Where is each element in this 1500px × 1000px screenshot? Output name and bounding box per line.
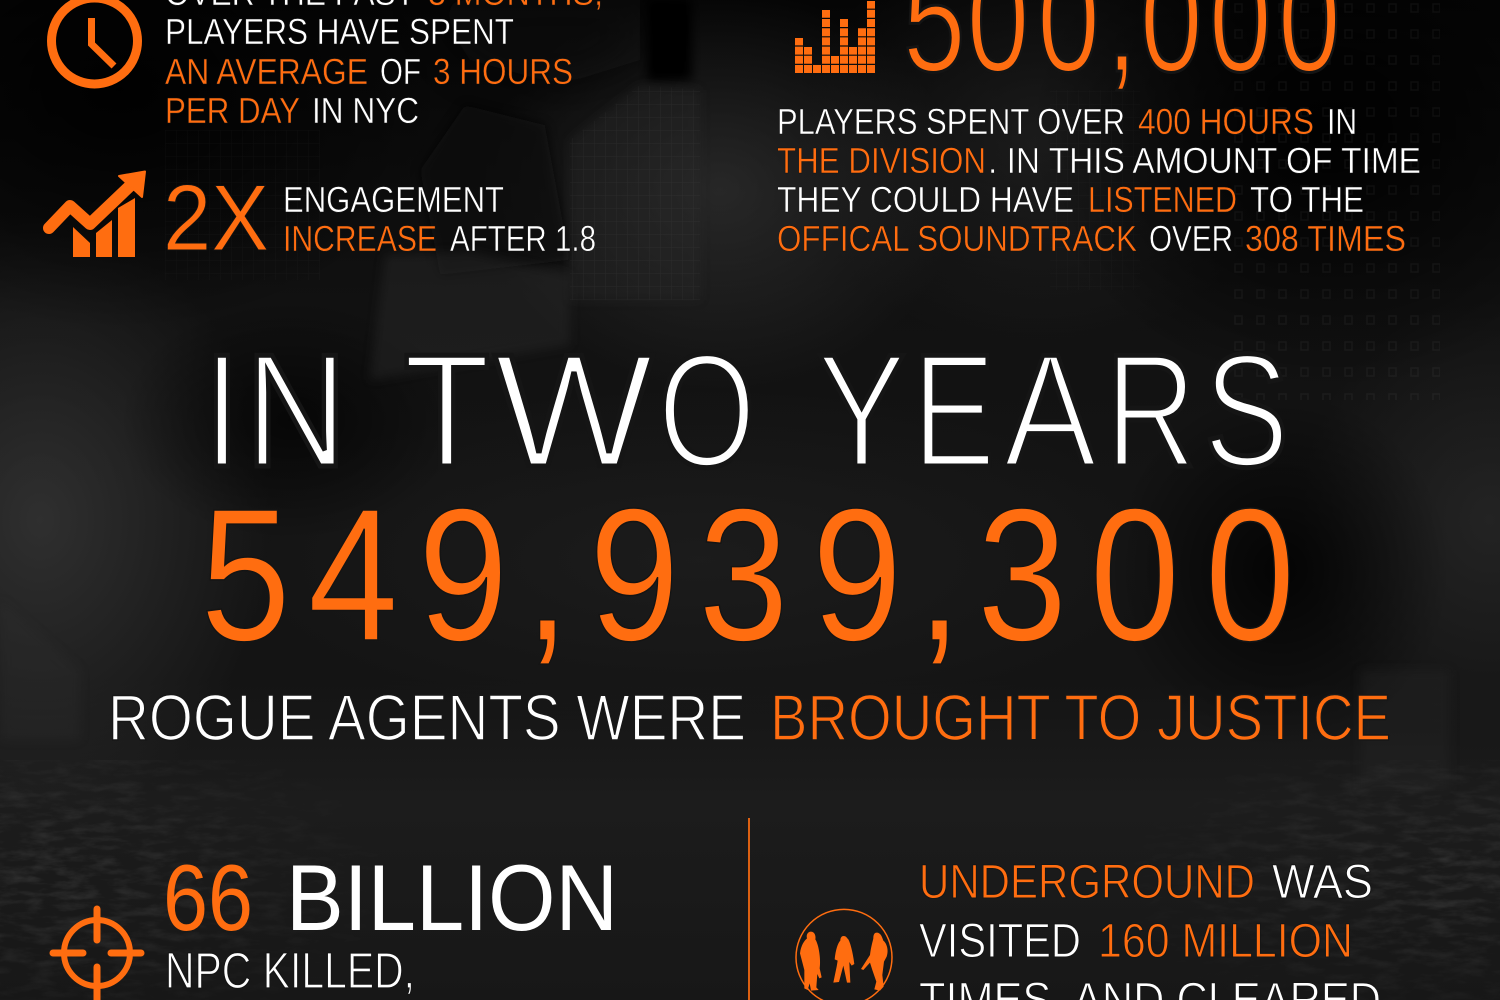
headline: in two years: R bbox=[1106, 320, 1196, 501]
number: 2X: 2X bbox=[163, 165, 269, 270]
text: soundtrack comparison: THE DIVISION bbox=[777, 140, 986, 181]
icon: crosshair bbox=[53, 909, 141, 1000]
text: soundtrack comparison: 400 HOURS bbox=[1138, 101, 1314, 142]
text: soundtrack comparison: OFFICAL SOUNDTRACK bbox=[777, 218, 1137, 259]
text: underground visited 160 million times bbox=[919, 856, 1381, 1000]
text: engagement increase after 1.8: ENGAGEMENT bbox=[283, 179, 504, 220]
headline: in two years bbox=[204, 320, 1289, 501]
text: average hours per day: OF bbox=[380, 51, 421, 92]
headline: in two years: Y bbox=[817, 321, 906, 501]
text: average hours per day bbox=[165, 0, 603, 131]
text: soundtrack comparison: TO THE bbox=[1250, 179, 1364, 220]
text: soundtrack comparison: THEY COULD HAVE bbox=[777, 179, 1074, 220]
icon: clock bbox=[52, 0, 138, 84]
text: soundtrack comparison: . IN THIS AMOUNT OF TIME bbox=[988, 140, 1421, 181]
stat: engagement increase bbox=[49, 165, 596, 270]
text: engagement increase after 1.8: INCREASE bbox=[283, 218, 437, 259]
text: engagement increase after 1.8: AFTER 1.8 bbox=[450, 218, 596, 259]
text: soundtrack comparison: 308 TIMES bbox=[1245, 218, 1406, 259]
text: average hours per day: 3 HOURS bbox=[433, 51, 573, 92]
text: soundtrack comparison: IN bbox=[1327, 101, 1357, 142]
caption: rogue agents brought to justice: BROUGHT TO JUSTICE bbox=[770, 681, 1391, 754]
number: 66 billion: BILLION bbox=[286, 845, 618, 950]
stat: underground visits bbox=[796, 856, 1381, 1000]
number: 66 billion bbox=[163, 845, 618, 950]
text: underground visited 160 million times: 160 MILLION bbox=[1098, 915, 1353, 968]
headline: in two years: T bbox=[404, 322, 490, 501]
icon: equalizer bars bbox=[799, 1, 871, 73]
icon: rising chart bbox=[49, 172, 145, 257]
text: soundtrack comparison bbox=[777, 101, 1421, 259]
caption: rogue agents brought to justice bbox=[108, 681, 1391, 754]
text: average hours per day: IN NYC bbox=[312, 90, 419, 131]
text: underground visited 160 million times: WAS bbox=[1272, 856, 1373, 909]
text: underground visited 160 million times: VISITED bbox=[919, 915, 1081, 968]
headline: in two years: N bbox=[245, 322, 347, 501]
stat: 500,000 players bbox=[777, 0, 1421, 259]
text: average hours per day: AN AVERAGE bbox=[165, 51, 368, 92]
text: NPC killed: NPC KILLED, bbox=[165, 942, 415, 999]
text: soundtrack comparison: PLAYERS SPENT OVER bbox=[777, 101, 1125, 142]
text: underground visited 160 million times: UNDERGROUND bbox=[919, 856, 1255, 909]
headline: in two years: A bbox=[1004, 320, 1097, 500]
text: engagement increase after 1.8 bbox=[283, 179, 596, 259]
headline: in two years: E bbox=[912, 321, 995, 501]
icon: three agents in circle bbox=[796, 909, 892, 1000]
text: soundtrack comparison: OVER bbox=[1149, 218, 1233, 259]
headline: in two years: O bbox=[658, 320, 756, 501]
caption: rogue agents brought to justice: ROGUE AGENTS WERE bbox=[108, 681, 746, 754]
headline: in two years: W bbox=[494, 321, 654, 500]
stat: hours per day bbox=[52, 0, 603, 131]
headline: in two years: S bbox=[1204, 321, 1289, 500]
headline: in two years: I bbox=[204, 320, 240, 500]
stat: NPC killed bbox=[53, 845, 618, 1000]
number: 66 billion: 66 bbox=[163, 845, 253, 950]
text: average hours per day: PLAYERS HAVE SPENT bbox=[165, 11, 514, 52]
number: rogue agents count: 549,939,300 bbox=[200, 470, 1295, 681]
text: average hours per day: PER DAY bbox=[165, 90, 300, 131]
text: soundtrack comparison: LISTENED bbox=[1088, 179, 1237, 220]
